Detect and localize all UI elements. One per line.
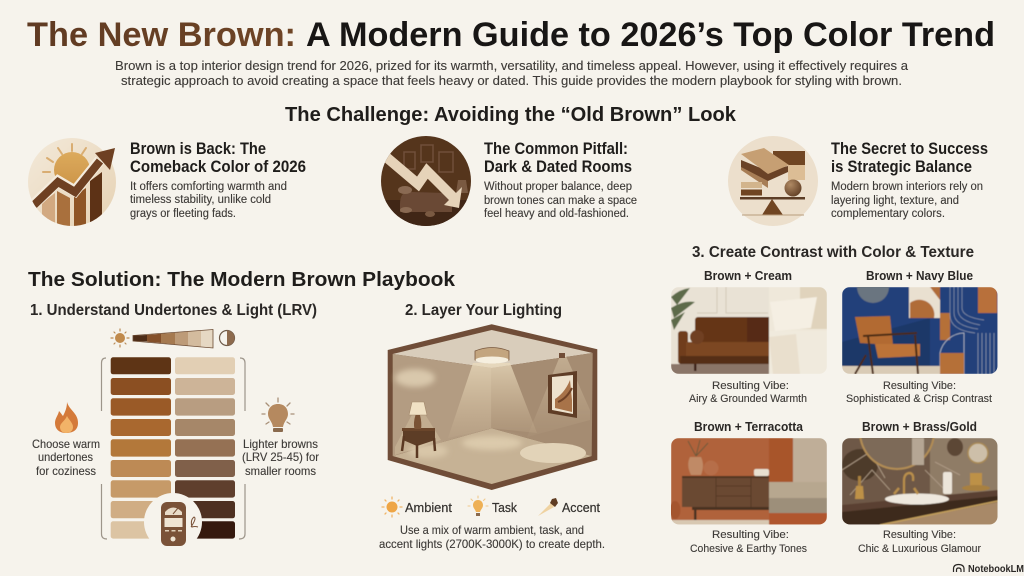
vibe caption: Airy & Grounded Warmth <box>689 393 807 405</box>
icon: NotebookLM logo <box>954 564 964 572</box>
body text <box>484 181 637 220</box>
swatches: warm column <box>111 357 171 539</box>
heading: is Strategic Balance <box>831 158 972 176</box>
card: brown and terracotta <box>670 420 827 555</box>
body text: Modern brown interiors rely on <box>831 181 983 193</box>
swatches: neutral column <box>175 357 235 539</box>
illustration: room with layered lighting <box>388 324 597 490</box>
panel: contrast with color and texture <box>670 244 1000 555</box>
icon: dark room with falling arrow <box>381 136 471 230</box>
warm undertones note: for coziness <box>36 464 96 478</box>
vibe caption: Cohesive & Earthy Tones <box>690 543 807 555</box>
vibe caption <box>689 380 807 405</box>
body text: layering light, texture, and <box>831 195 959 207</box>
icon: LRV meter <box>144 493 202 551</box>
body text: It offers comforting warmth and <box>130 181 287 193</box>
body text: brown tones can make a space <box>484 195 637 207</box>
icon: material layers on balance <box>728 136 818 226</box>
heading: Comeback Color of 2026 <box>130 158 306 176</box>
heading: Dark & Dated Rooms <box>484 158 632 176</box>
heading <box>130 140 306 176</box>
panel: strategic balance <box>728 136 988 226</box>
icon: accent spotlight <box>538 498 558 516</box>
vibe caption <box>846 380 992 405</box>
panel: common pitfall <box>381 136 637 230</box>
lighting caption <box>379 523 605 551</box>
label: Brown + Cream <box>704 269 792 283</box>
vibe caption: Sophisticated & Crisp Contrast <box>846 393 992 405</box>
panel: undertones and light <box>30 302 319 551</box>
card: brown and cream <box>671 269 827 405</box>
icon: light bulb <box>262 398 294 432</box>
NotebookLM badge <box>954 563 1024 575</box>
vibe caption: Resulting Vibe: <box>883 380 956 392</box>
lighter browns note: smaller rooms <box>245 464 316 478</box>
body text <box>130 181 287 220</box>
heading: The Secret to Success <box>831 140 988 158</box>
icon: half circle <box>220 330 235 346</box>
title: The New Brown: <box>27 16 296 54</box>
label: Brown + Navy Blue <box>866 269 973 283</box>
body text: feel heavy and old-fashioned. <box>484 208 629 220</box>
vibe caption <box>690 529 807 555</box>
icon: ambient sun <box>382 497 402 517</box>
heading <box>831 140 988 176</box>
photo: marble vanity with brass fixtures <box>842 438 998 524</box>
task label: Task <box>492 500 517 515</box>
warm undertones note: Choose warm <box>32 437 100 451</box>
label: Brown + Brass/Gold <box>862 420 977 434</box>
icon: rising arrow with sun <box>28 138 116 230</box>
ambient label: Ambient <box>405 500 452 515</box>
panel: layer your lighting <box>379 302 605 551</box>
intro text: strategic approach to avoid creating a space that feels heavy or dated. This guide provides the modern playbook for styling with brown. <box>121 73 902 88</box>
warm undertones note <box>32 437 100 478</box>
photo: sofa with cream textiles <box>671 287 827 374</box>
step 1 heading: 1. Understand Undertones & Light (LRV) <box>30 302 317 319</box>
icon: flame <box>55 402 78 433</box>
brackets <box>102 358 245 539</box>
LRV scale wedge <box>133 330 213 348</box>
body text <box>831 181 983 220</box>
body text: complementary colors. <box>831 208 945 220</box>
step 3 heading: 3. Create Contrast with Color & Texture <box>692 244 974 261</box>
heading: Brown is Back: The <box>130 140 266 158</box>
label: Brown + Terracotta <box>694 420 804 434</box>
photo: sideboard with terracotta wall <box>670 438 827 525</box>
vibe caption <box>858 529 981 555</box>
intro text <box>115 58 909 88</box>
step 2 heading: 2. Layer Your Lighting <box>405 302 562 319</box>
warm undertones note: undertones <box>38 450 93 464</box>
body text: grays or fleeting fads. <box>130 208 236 220</box>
title: A Modern Guide to 2026’s Top Color Trend <box>306 16 995 54</box>
intro text: Brown is a top interior design trend for 2026, prized for its warmth, versatility, and timeless appeal. However, using it effectively requires a <box>115 58 909 73</box>
vibe caption: Resulting Vibe: <box>712 529 789 541</box>
card: brown and navy <box>842 269 998 405</box>
heading: The Common Pitfall: <box>484 140 628 158</box>
vibe caption: Chic & Luxurious Glamour <box>858 543 981 555</box>
body text: Without proper balance, deep <box>484 181 632 193</box>
lighter browns note: (LRV 25-45) for <box>242 450 319 464</box>
vibe caption: Resulting Vibe: <box>712 380 789 392</box>
heading: the challenge: The Challenge: Avoiding the “Old Brown” Look <box>285 103 737 126</box>
vibe caption: Resulting Vibe: <box>883 529 956 541</box>
lighting caption: accent lights (2700K-3000K) to create depth. <box>379 537 605 551</box>
lighter browns note: Lighter browns <box>243 437 318 451</box>
icon: sun <box>111 329 129 347</box>
panel: brown is back <box>28 138 306 230</box>
lighting caption: Use a mix of warm ambient, task, and <box>400 523 584 537</box>
lighter browns note <box>242 437 319 478</box>
light type legend <box>382 496 600 517</box>
card: brown and brass <box>842 422 998 552</box>
accent label: Accent <box>562 500 600 515</box>
heading <box>484 140 632 176</box>
heading: the solution: The Solution: The Modern Brown Playbook <box>28 268 456 291</box>
body text: timeless stability, unlike cold <box>130 194 271 206</box>
icon: task bulb <box>468 496 488 516</box>
photo: leather chair on navy wall <box>842 287 998 374</box>
